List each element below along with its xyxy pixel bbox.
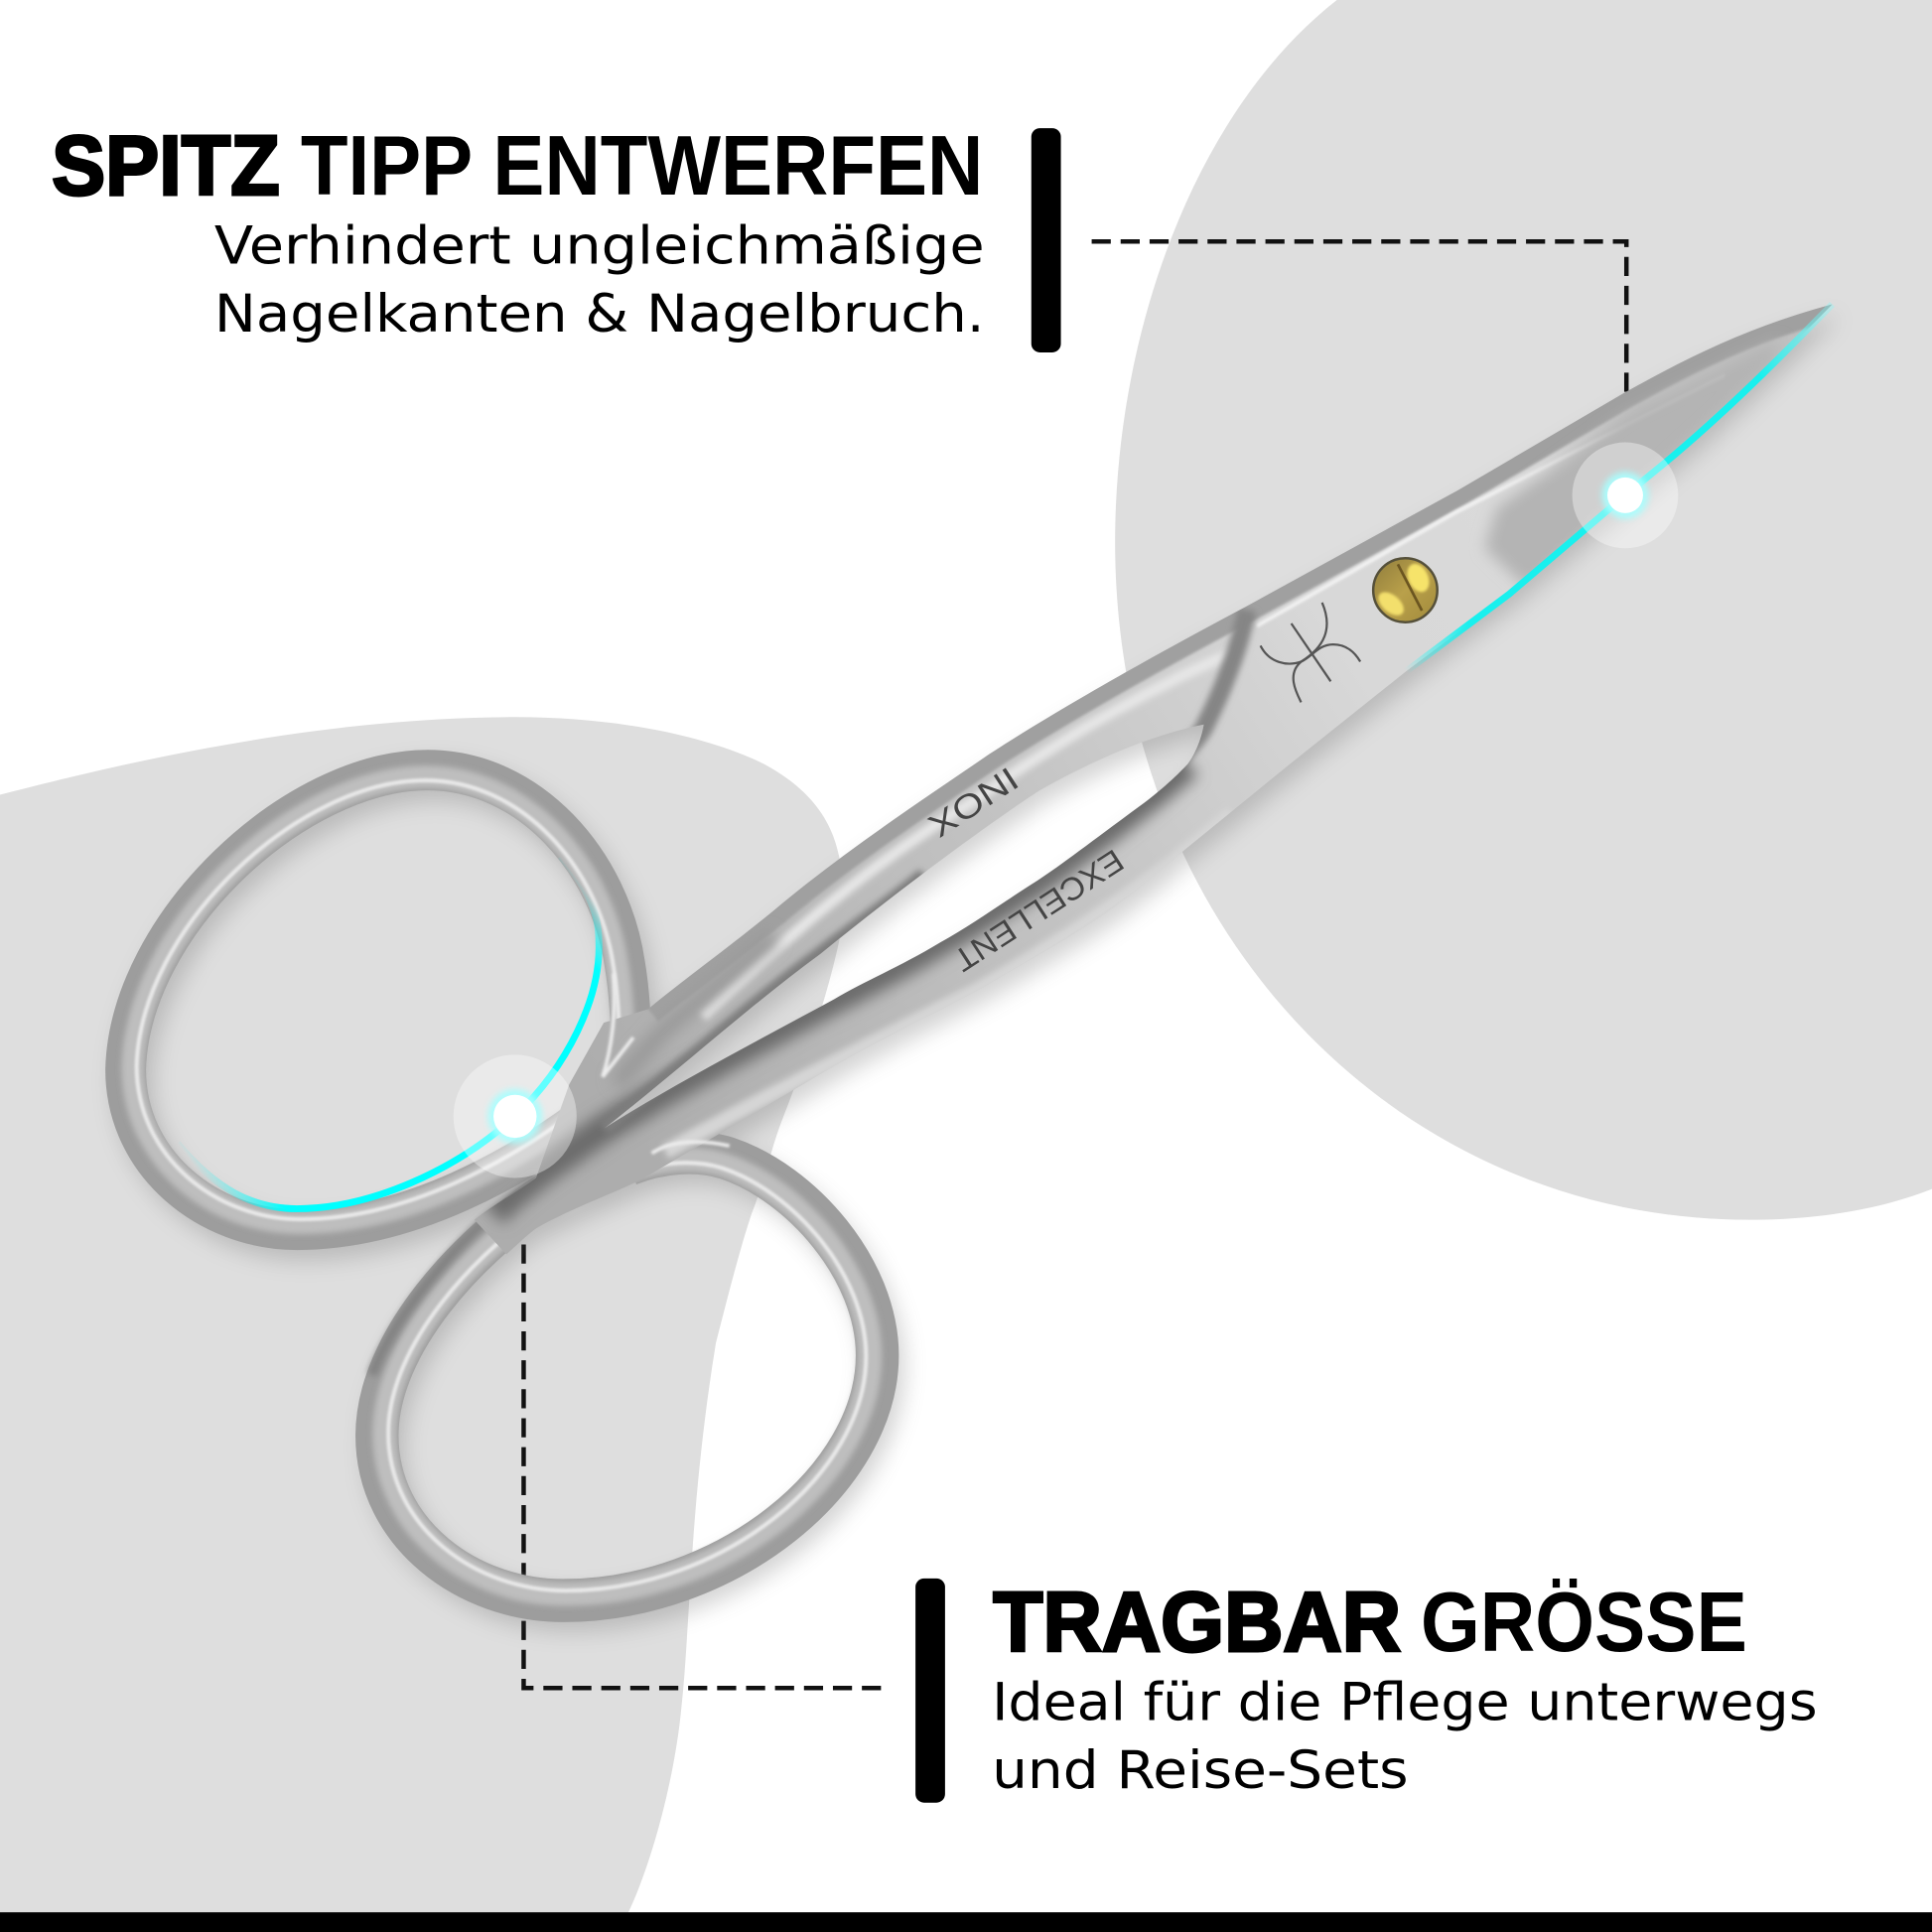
connector: bottom dashed line — [523, 1244, 885, 1688]
description: top: Nagelkanten & Nagelbruch. — [214, 285, 985, 345]
blob: lower left grey shape — [0, 717, 843, 1912]
engraving: inox: INOX — [921, 759, 1025, 844]
accent bar: bottom — [915, 1579, 945, 1803]
pivot screw — [1373, 558, 1438, 622]
heading: spitz tipp entwerfen: SPITZ — [52, 118, 280, 213]
blob: upper right grey shape — [1115, 0, 1932, 1220]
heading: tragbar groesse — [993, 1575, 1747, 1670]
description: top: Verhindert ungleichmäßige — [214, 217, 985, 277]
scissors body: arms and blades — [475, 304, 1833, 1254]
heading: tragbar groesse: GRÖSSE — [1421, 1575, 1747, 1670]
lower arm dark band — [492, 763, 1187, 1213]
description: bottom: Ideal für die Pflege unterwegs — [992, 1674, 1818, 1733]
accent bar: top — [1032, 128, 1061, 352]
marker: blade tip — [1573, 443, 1678, 548]
description: bottom: und Reise-Sets — [992, 1741, 1409, 1801]
engraving: excellent: EXCELLENT — [947, 843, 1130, 979]
cyan edge highlight: blade — [1406, 305, 1832, 671]
scissors shadow — [133, 316, 1840, 1611]
arm highlight — [702, 653, 1232, 1017]
footer bar — [0, 1912, 1932, 1932]
cyan edge highlight: ring — [178, 857, 599, 1208]
connector: top dashed line — [1092, 241, 1626, 394]
lower arm light band — [665, 813, 1232, 1152]
logo engraving — [1261, 603, 1360, 702]
description: top — [214, 217, 985, 345]
scissors product — [126, 283, 1849, 1611]
description: bottom — [992, 1674, 1818, 1801]
lower ring dark outer edge — [372, 1177, 537, 1375]
upper edge band — [648, 305, 1832, 1009]
blade facet — [1484, 339, 1780, 589]
callout: top text block — [52, 118, 985, 345]
finger ring: upper — [126, 770, 632, 1230]
upper arm lower edge dark — [604, 875, 924, 1129]
junction highlights — [603, 973, 730, 1154]
callout: bottom text block — [992, 1575, 1818, 1801]
blade highlight line — [1257, 436, 1604, 627]
heading: spitz tipp entwerfen — [52, 118, 983, 213]
fold line — [1146, 610, 1247, 794]
upper arm base dark — [617, 936, 773, 1084]
finger ring: lower — [372, 1153, 878, 1600]
marker: ring — [454, 1054, 577, 1177]
heading: spitz tipp entwerfen: TIPP ENTWERFEN — [301, 118, 983, 213]
heading: tragbar groesse: TRAGBAR — [993, 1575, 1401, 1670]
